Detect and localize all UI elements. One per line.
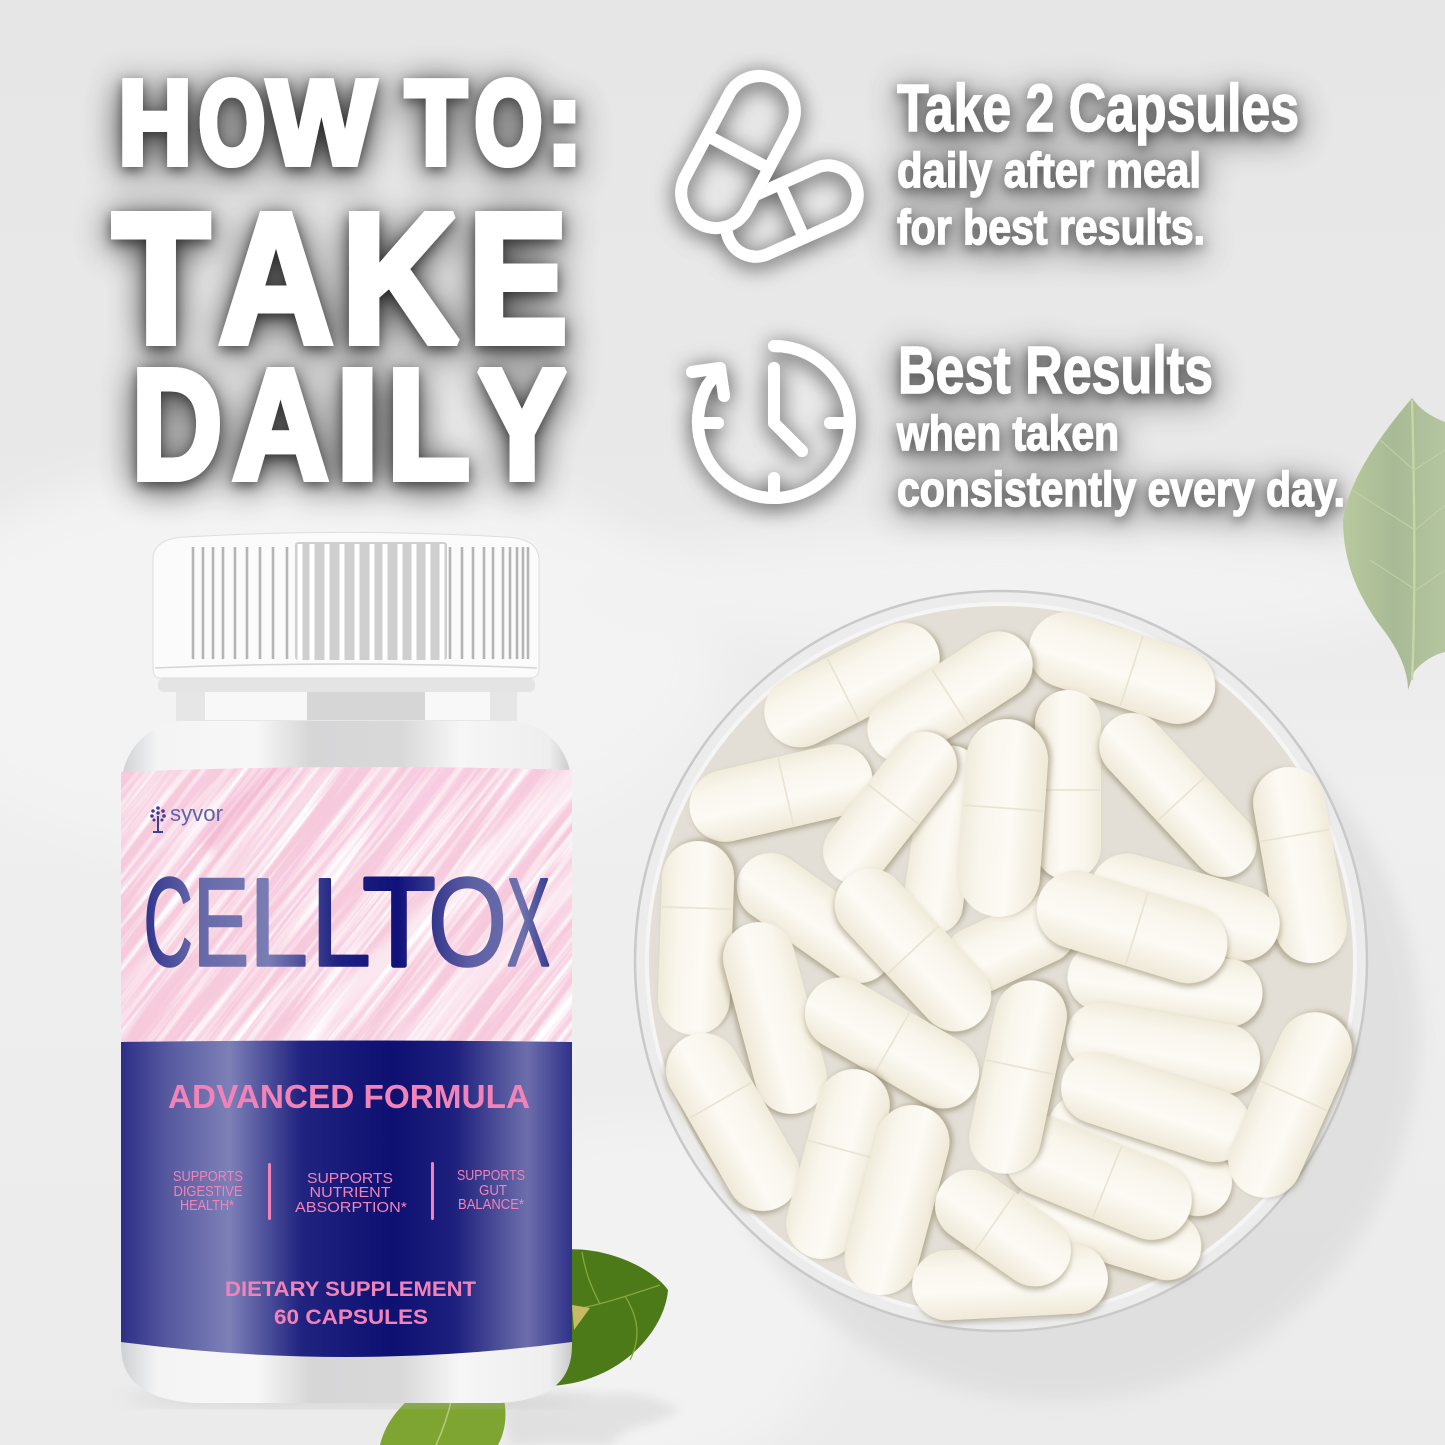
- panel: glass bowl of capsules: [635, 591, 1420, 1402]
- benefit: digestive health: SUPPORTS: [173, 1168, 243, 1185]
- icon: tree: [150, 806, 166, 833]
- divider: [268, 1163, 271, 1220]
- label heading: advanced formula: ADVANCED FORMULA: [168, 1078, 530, 1115]
- benefit: nutrient absorption: NUTRIENT: [310, 1184, 390, 1201]
- brand: syvor: [150, 801, 223, 833]
- heading: how to take daily: O: [475, 56, 542, 190]
- benefit: digestive health: [173, 1168, 243, 1214]
- leaf shadow on table: [500, 1392, 680, 1445]
- bottle neck: [176, 680, 517, 728]
- heading: how to take daily: H: [119, 56, 192, 190]
- benefit: digestive health: HEALTH*: [180, 1197, 234, 1214]
- product name: celltox: E: [193, 854, 249, 992]
- product name: celltox: X: [507, 854, 550, 992]
- heading: how to take daily: E: [469, 176, 567, 382]
- glass bowl: [635, 591, 1367, 1331]
- heading: how to take daily: O: [199, 56, 265, 190]
- label: pink panel: [121, 767, 572, 1042]
- text block: take 2 capsules: for best results.: [897, 201, 1205, 255]
- text block: take 2 capsules: Take 2 Capsules: [897, 71, 1299, 146]
- text block: best results: Best Results: [898, 333, 1213, 408]
- heading: how to take daily: K: [342, 176, 458, 382]
- heading: how to take daily: D: [132, 338, 222, 512]
- text block: take 2 capsules: [897, 71, 1299, 255]
- benefit: nutrient absorption: SUPPORTS: [307, 1170, 393, 1187]
- product name: celltox: C: [144, 854, 193, 992]
- benefit: nutrient absorption: ABSORPTION*: [295, 1199, 407, 1216]
- heading: how to take daily: L: [387, 338, 470, 512]
- brand: syvor: syvor: [170, 801, 223, 826]
- text block: best results: [896, 333, 1345, 517]
- icon: two capsules: [669, 64, 867, 266]
- text block: take 2 capsules: daily after meal: [897, 144, 1201, 198]
- bottle ground shadow: [125, 1390, 575, 1406]
- benefit: gut balance: GUT: [479, 1182, 507, 1199]
- heading: how to take daily: :: [546, 56, 582, 190]
- text block: best results: when taken: [896, 407, 1119, 461]
- decorative leaf: right edge: [1343, 398, 1445, 690]
- benefit: digestive health: DIGESTIVE: [174, 1183, 242, 1200]
- bowl shadow: [696, 662, 1420, 1402]
- heading: how to take daily: A: [232, 338, 328, 512]
- benefit: gut balance: BALANCE*: [458, 1196, 524, 1213]
- heading: how to take daily: W: [268, 56, 376, 190]
- label: navy panel: [121, 1040, 572, 1357]
- text block: best results: consistently every day.: [897, 463, 1345, 517]
- panel: supplement bottle: [121, 532, 572, 1410]
- product name: celltox: [144, 854, 550, 992]
- footer: capsule count: 60 CAPSULES: [274, 1306, 428, 1329]
- footer: dietary supplement: DIETARY SUPPLEMENT: [225, 1278, 476, 1301]
- capsules pile: [652, 602, 1364, 1322]
- bottle cap: [153, 532, 539, 678]
- benefit: gut balance: SUPPORTS: [457, 1167, 525, 1184]
- product name: celltox: L: [249, 854, 308, 992]
- decorative leaf: bottom: [380, 1395, 505, 1445]
- heading: how to take daily: I: [336, 338, 380, 512]
- divider: [431, 1162, 434, 1220]
- heading: how to take daily: T: [406, 56, 466, 190]
- decorative leaf: behind bottle right: [545, 1249, 668, 1386]
- heading: how to take daily: [113, 56, 582, 512]
- heading: how to take daily: Y: [478, 338, 566, 512]
- product name: celltox: L: [311, 854, 371, 992]
- heading: how to take daily: A: [219, 176, 333, 382]
- product name: celltox: T: [363, 854, 435, 992]
- heading: how to take daily: T: [113, 176, 210, 382]
- product name: celltox: O: [428, 854, 507, 992]
- benefit: gut balance: [457, 1167, 525, 1213]
- benefit: nutrient absorption: [295, 1170, 407, 1216]
- bottle body: [121, 721, 572, 1403]
- icon: clock with refresh arrow: [692, 346, 850, 498]
